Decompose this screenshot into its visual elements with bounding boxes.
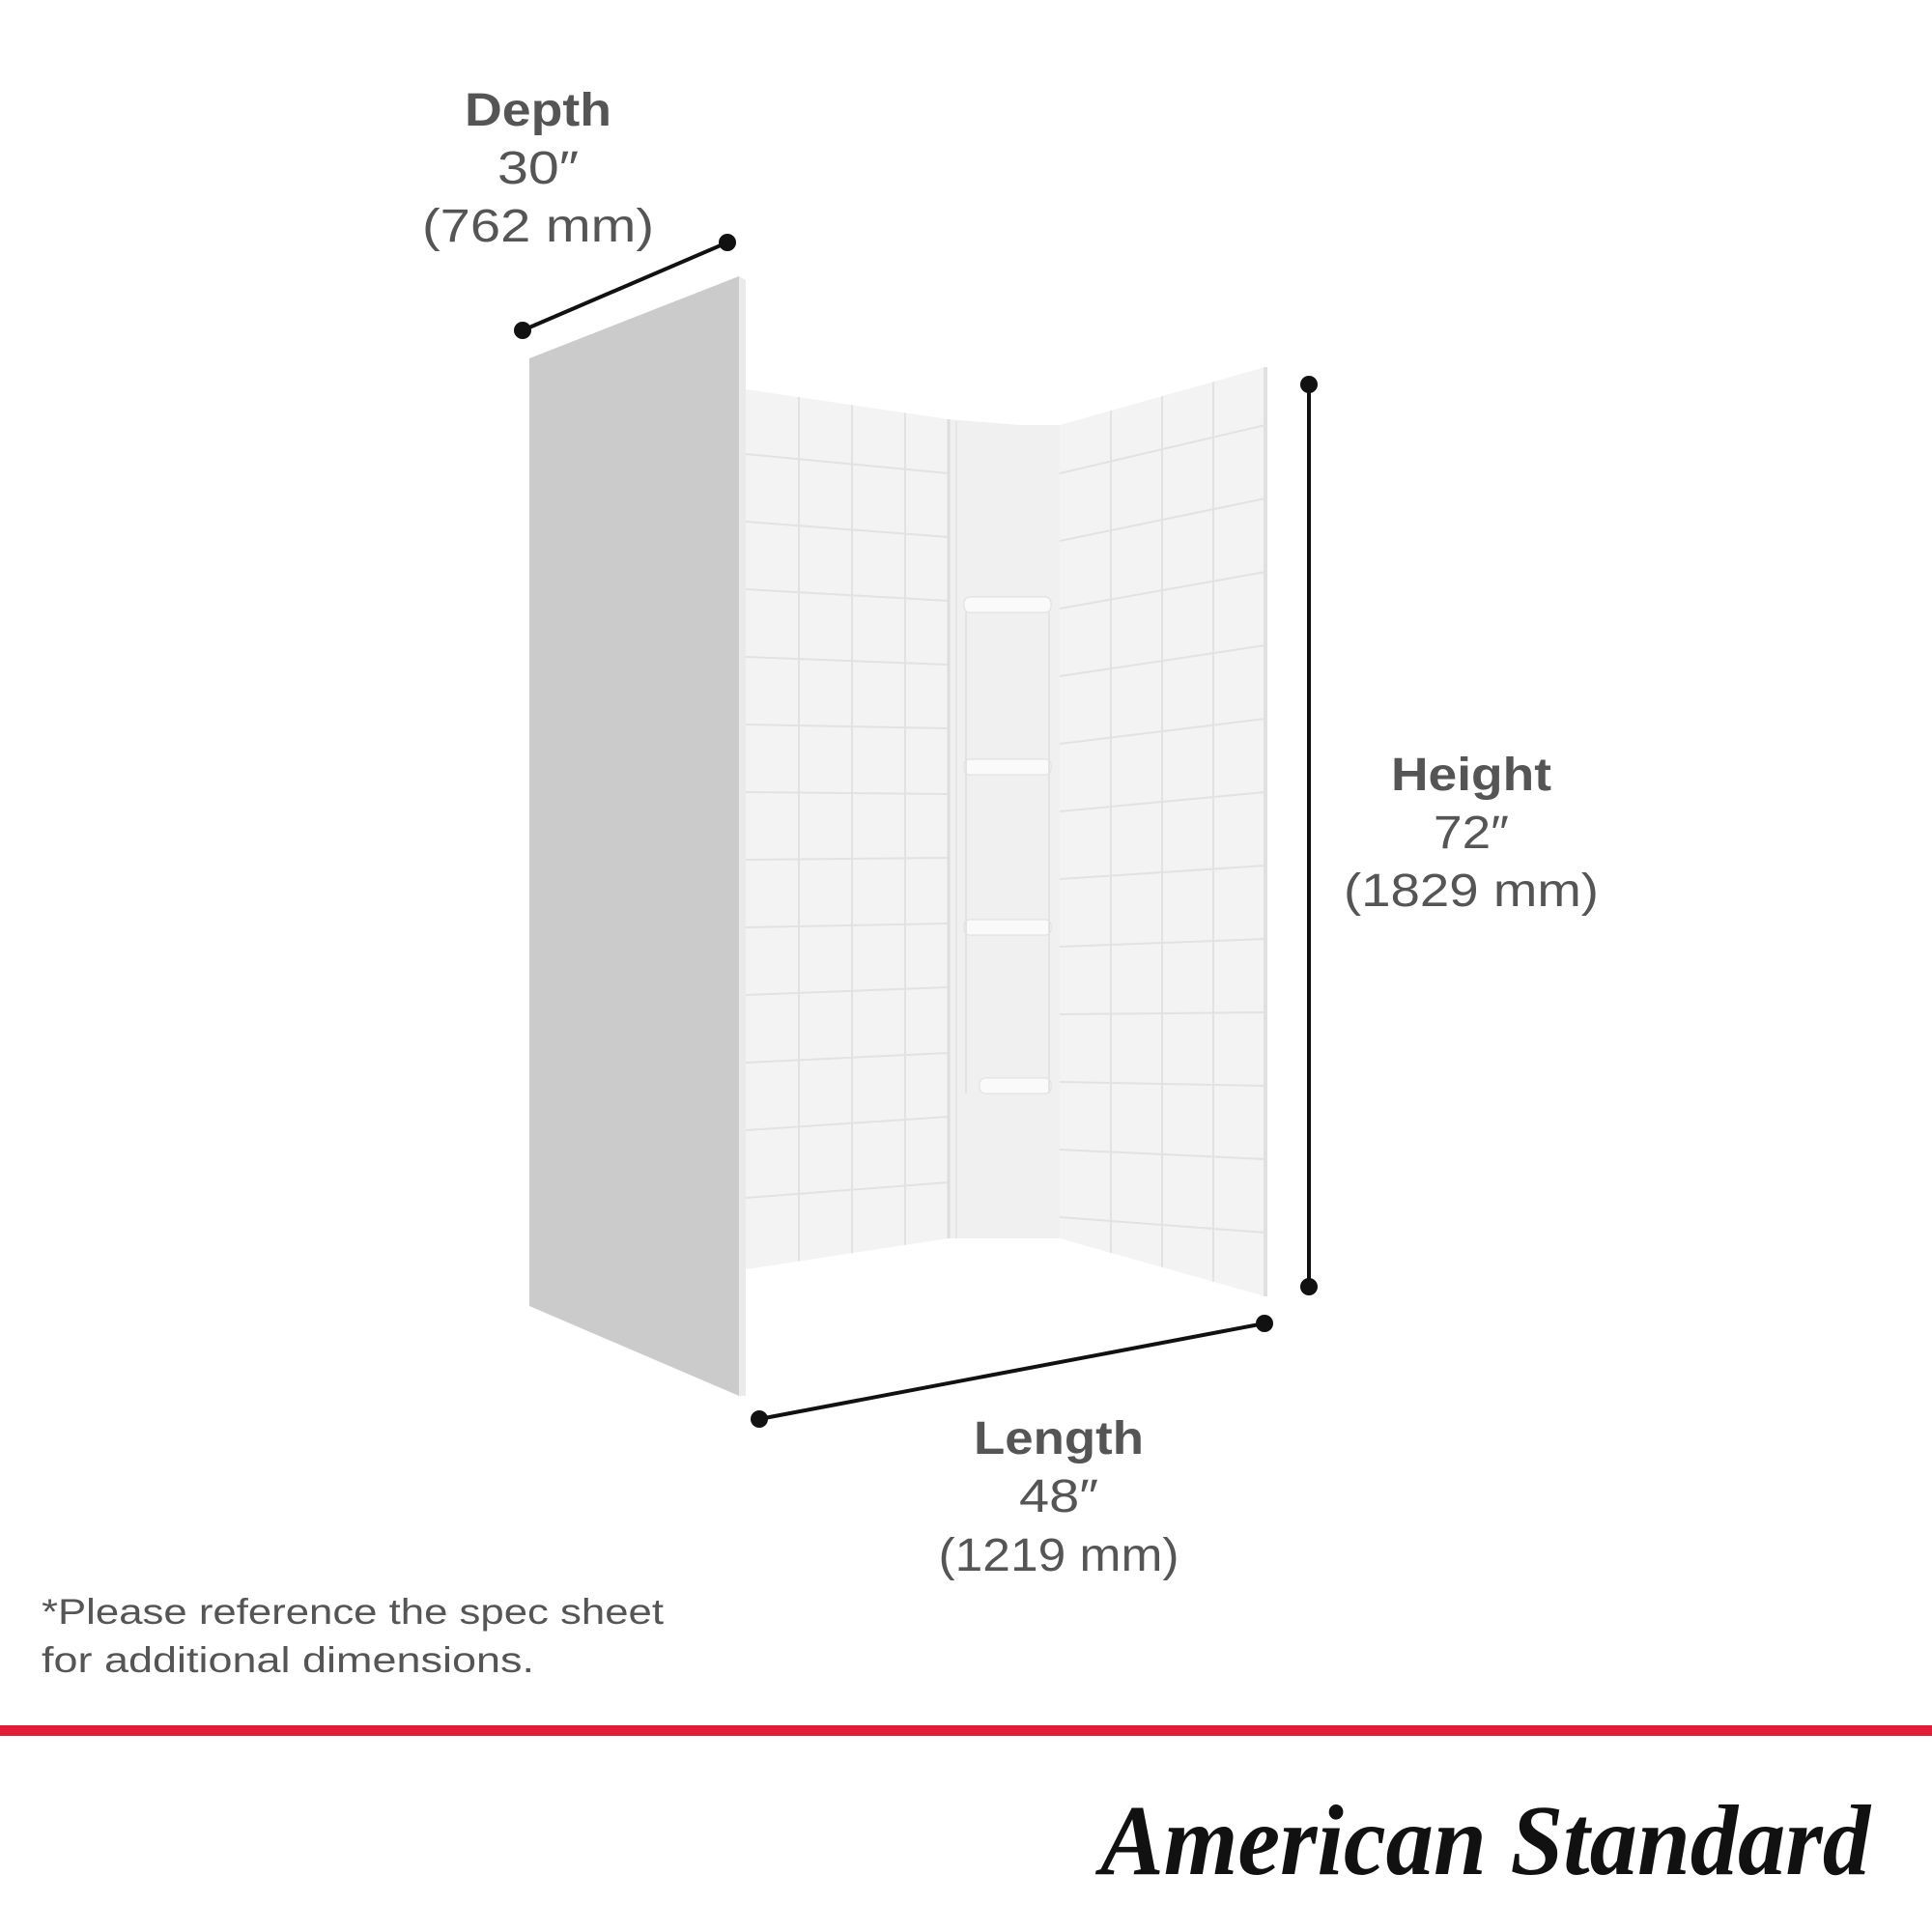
label: height xyxy=(1344,750,1599,917)
footnote: for additional dimensions. xyxy=(42,1640,534,1680)
logo: American Standard: American Standard xyxy=(1094,1785,1872,1896)
dimension: length line xyxy=(751,1315,1273,1428)
label: depth: (762 mm) xyxy=(422,201,654,252)
footnote: *Please reference the spec sheet xyxy=(42,1592,665,1632)
back left wall xyxy=(746,386,949,1275)
label: depth: 30″ xyxy=(497,143,579,194)
dimension: depth line xyxy=(514,234,736,339)
red divider xyxy=(0,1725,1932,1736)
label: length xyxy=(939,1413,1179,1581)
label: height: (1829 mm) xyxy=(1344,866,1599,917)
right wall xyxy=(1060,367,1265,1304)
shower wall illustration xyxy=(529,276,1265,1396)
left side panel xyxy=(529,276,746,1396)
label: length: (1219 mm) xyxy=(939,1530,1179,1581)
footnote xyxy=(42,1592,665,1680)
label: height: Height xyxy=(1391,750,1551,801)
label: height: 72″ xyxy=(1434,808,1509,859)
corner with shelves xyxy=(949,419,1060,1238)
dimension: height line xyxy=(1300,376,1318,1295)
label: length: Length xyxy=(974,1413,1144,1464)
label: length: 48″ xyxy=(1019,1471,1098,1522)
label: depth: Depth xyxy=(465,85,611,136)
label: depth xyxy=(422,85,654,252)
